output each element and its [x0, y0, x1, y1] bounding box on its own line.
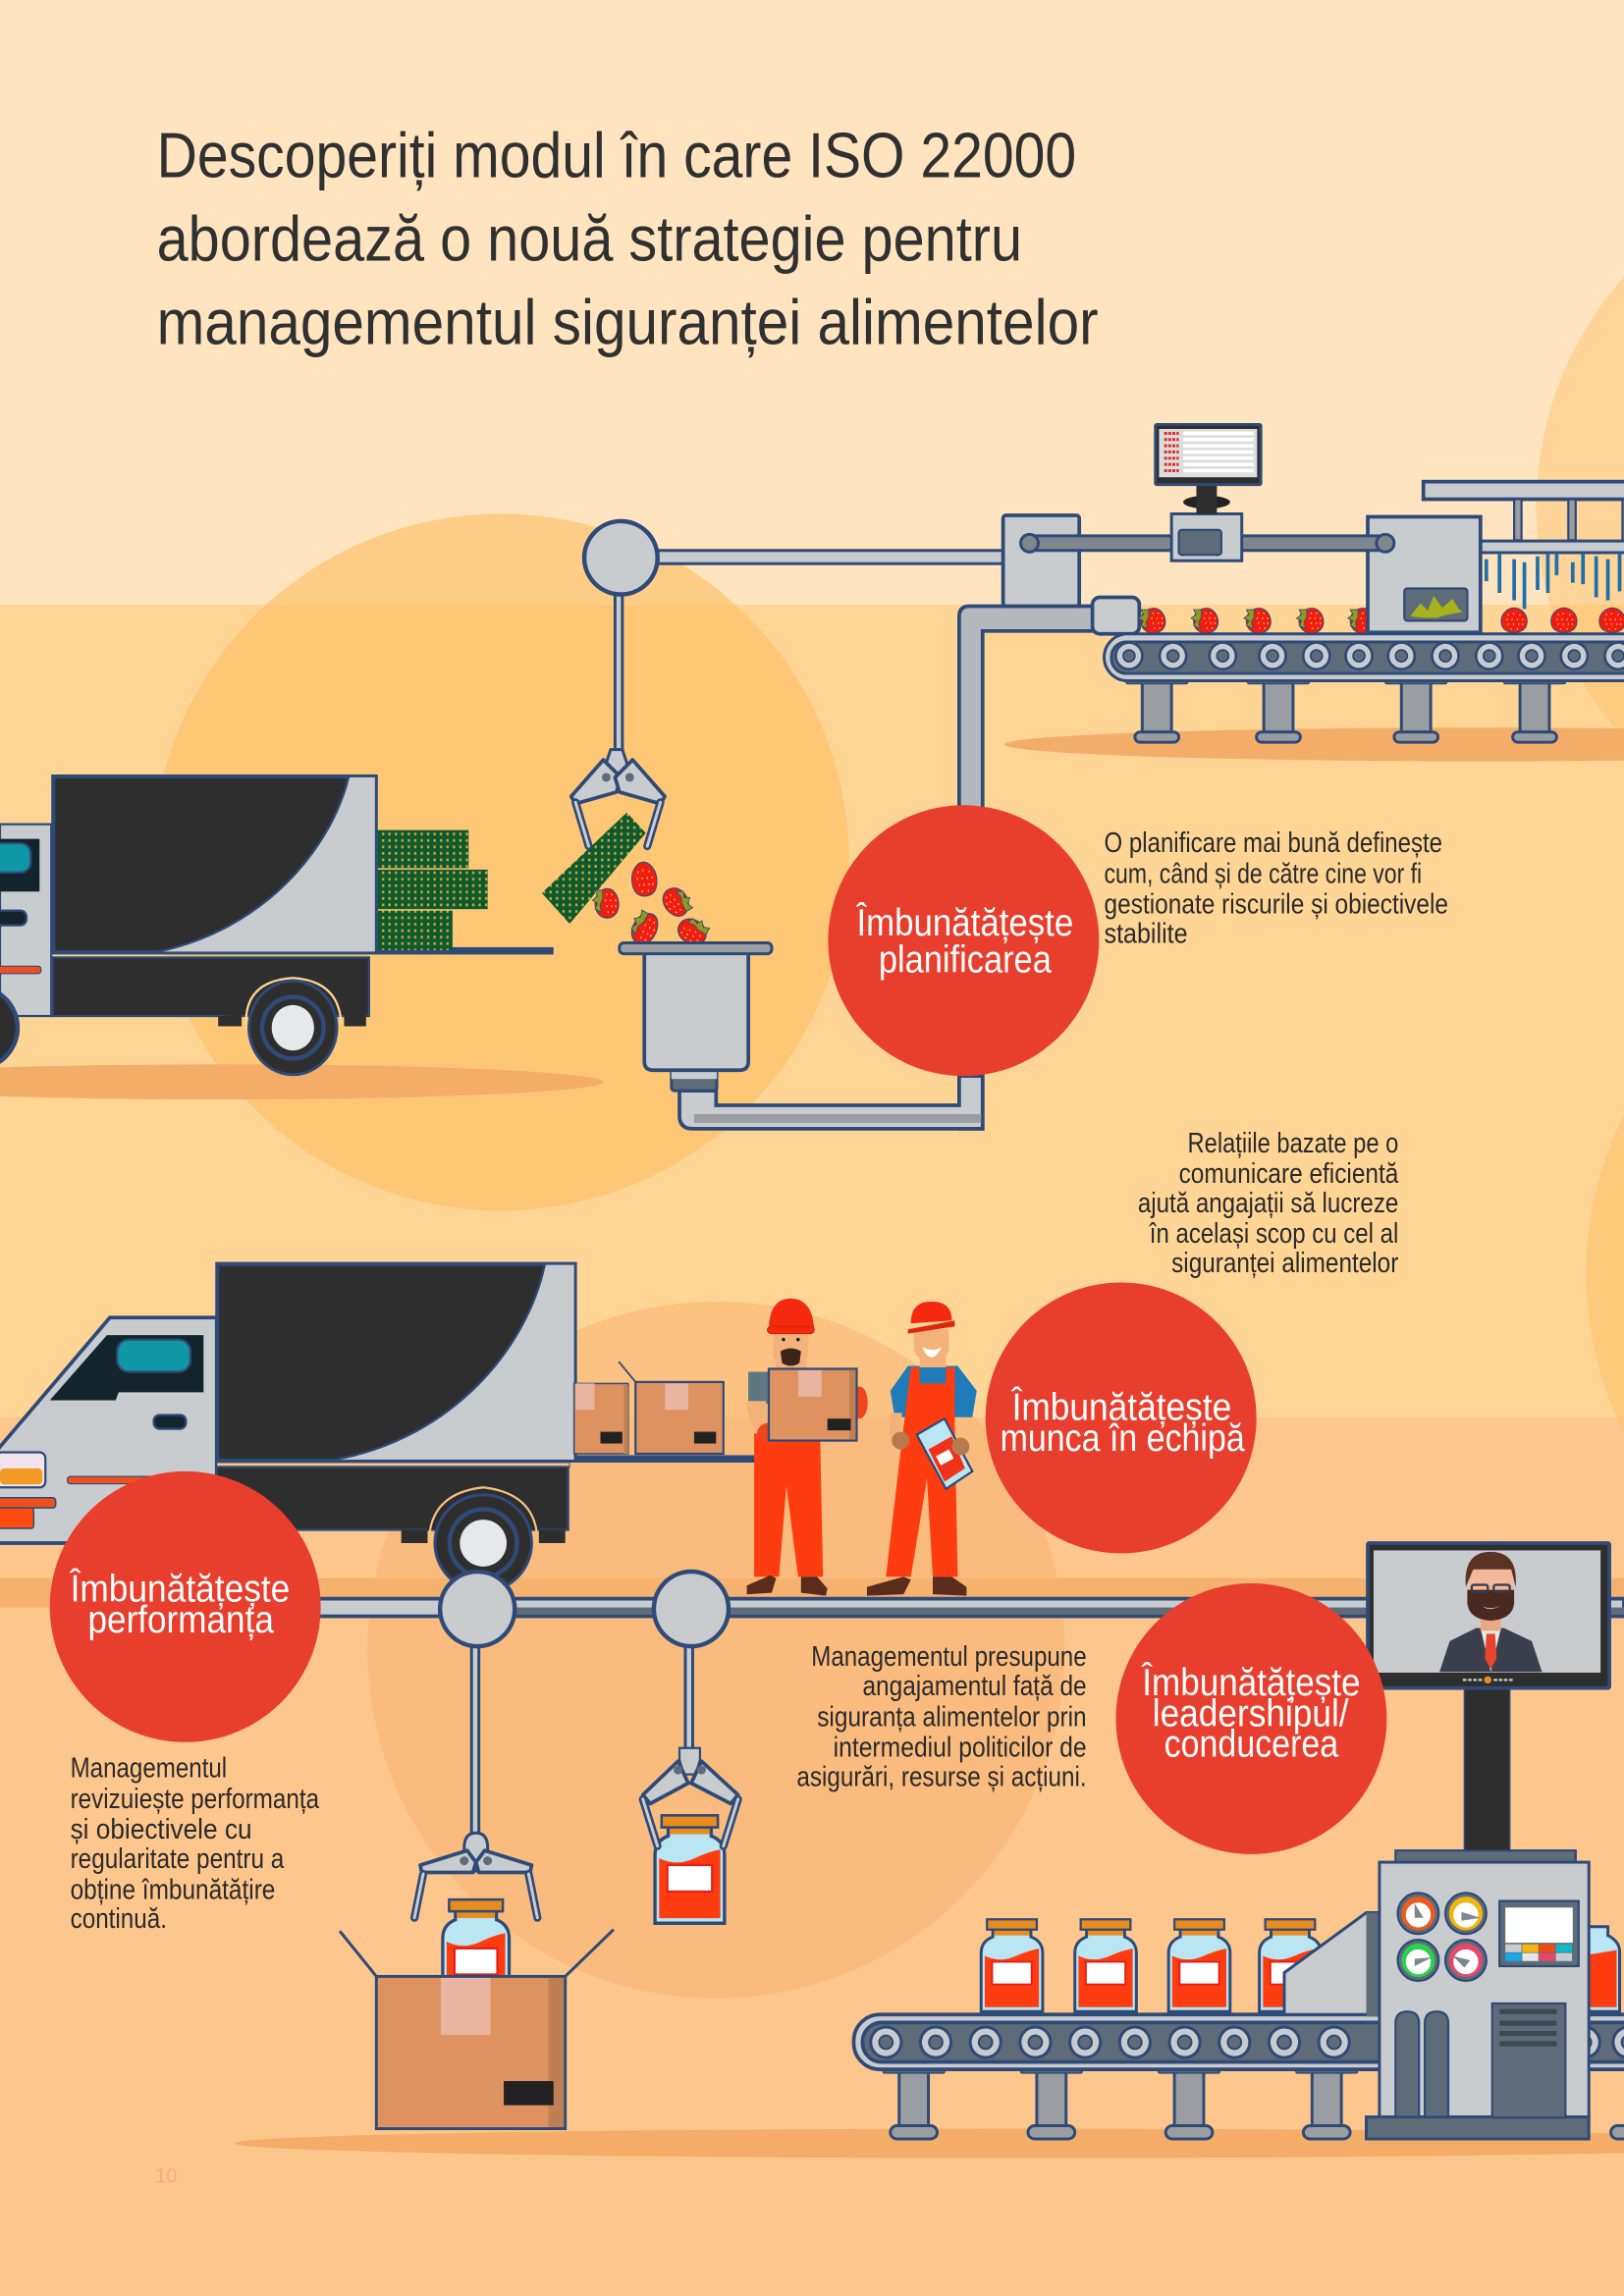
text: planning description: cum, când și de către cine vor fi	[1105, 858, 1422, 889]
falling strawberries	[593, 861, 712, 949]
text: performance description: regularitate pentru a	[71, 1843, 285, 1875]
text: performance description: și obiectivele cu	[71, 1814, 252, 1845]
text: leadership description	[796, 1641, 1087, 1793]
circle: improves leadership: Îmbunătățește	[1141, 1662, 1361, 1704]
text: teamwork description	[1138, 1128, 1399, 1279]
text: leadership description: angajamentul față de	[862, 1671, 1087, 1702]
text: performance description: revizuiește performanța	[71, 1784, 320, 1815]
text: leadership description: siguranța alimentelor prin	[817, 1701, 1087, 1733]
text: leadership description: asigurări, resurse și acțiuni.	[796, 1762, 1087, 1793]
text: performance description: Managementul	[71, 1753, 227, 1785]
top conveyor with rollers and legs	[1105, 634, 1624, 742]
filling machine	[1284, 1850, 1589, 2139]
circle: improves performance	[50, 1471, 321, 1742]
washing station	[1424, 482, 1624, 609]
shadow: upper conveyor	[1004, 727, 1624, 762]
text: planning description: gestionate riscurile și obiectivele	[1105, 889, 1448, 921]
text: planning description	[1105, 828, 1448, 949]
shadow: first truck	[0, 1064, 603, 1099]
cardboard box	[340, 1930, 614, 2129]
truck 1 with crates	[0, 775, 554, 1075]
circle: improves teamwork: Îmbunătățește	[1011, 1387, 1231, 1429]
text: teamwork description: comunicare eficientă	[1179, 1158, 1399, 1190]
screen stand	[1464, 1688, 1510, 1850]
shadow: bottom conveyor	[235, 2129, 1624, 2158]
text: teamwork description: ajută angajații să lucreze	[1138, 1188, 1398, 1219]
boxes on truck platform	[574, 1362, 762, 1463]
text: performance description: continuă.	[71, 1903, 167, 1935]
text: planning description: stabilite	[1105, 918, 1188, 949]
text: teamwork description: siguranței alimentelor	[1171, 1248, 1399, 1279]
text: leadership description: Managementul presupune	[811, 1641, 1087, 1673]
title: Descoperiți modul în care ISO 22000	[157, 119, 1076, 190]
circle: improves planning: Îmbunătățește	[856, 902, 1073, 944]
text: performance description	[71, 1753, 320, 1935]
page number: 10	[155, 2165, 177, 2188]
screen with manager	[1368, 1543, 1609, 1688]
pipe from hopper to conveyor	[679, 598, 1139, 1129]
title: abordează o nouă strategie pentru	[157, 202, 1022, 274]
circle: improves teamwork	[986, 1282, 1257, 1553]
text: performance description: obține îmbunătățire	[71, 1874, 275, 1905]
monitor with data rows	[1156, 425, 1261, 513]
text: teamwork description: în același scop cu cel al	[1149, 1218, 1398, 1250]
title: managementul siguranței alimentelor	[157, 286, 1099, 357]
text: teamwork description: Relațiile bazate pe o	[1188, 1128, 1398, 1159]
jars on bottom conveyor	[981, 1919, 1620, 2011]
hopper	[620, 942, 772, 1091]
worker with jar	[867, 1302, 977, 1596]
truck 2	[0, 1263, 575, 1591]
circle: improves performance: performanța	[87, 1599, 274, 1641]
circle: improves leadership: conducerea	[1164, 1724, 1339, 1766]
pivot nodes and arm rods	[440, 1572, 729, 1844]
circle: improves planning	[828, 805, 1099, 1076]
circle: improves planning: planificarea	[879, 938, 1052, 981]
text: planning description: O planificare mai bună definește	[1105, 828, 1442, 859]
text: leadership description: intermediul politicilor de	[834, 1733, 1087, 1764]
top pipeline and pivot	[584, 521, 1004, 750]
gripper holding jar	[643, 1748, 738, 1923]
title	[157, 119, 1099, 357]
belt line across the page	[293, 1599, 1624, 1617]
circle: improves teamwork: munca în echipă	[1001, 1417, 1245, 1460]
gripper with jar in box	[414, 1833, 537, 2005]
gripper with tilted crate	[542, 750, 665, 924]
circle: improves performance: Îmbunătățește	[70, 1569, 290, 1611]
bottom conveyor	[854, 2014, 1624, 2139]
circle: improves leadership	[1115, 1583, 1386, 1854]
circle: improves leadership: leadershipul/	[1153, 1692, 1349, 1735]
strawberries on conveyor	[1138, 608, 1624, 633]
worker with box	[746, 1299, 868, 1596]
processing machine with rod and left housing	[1003, 513, 1481, 632]
